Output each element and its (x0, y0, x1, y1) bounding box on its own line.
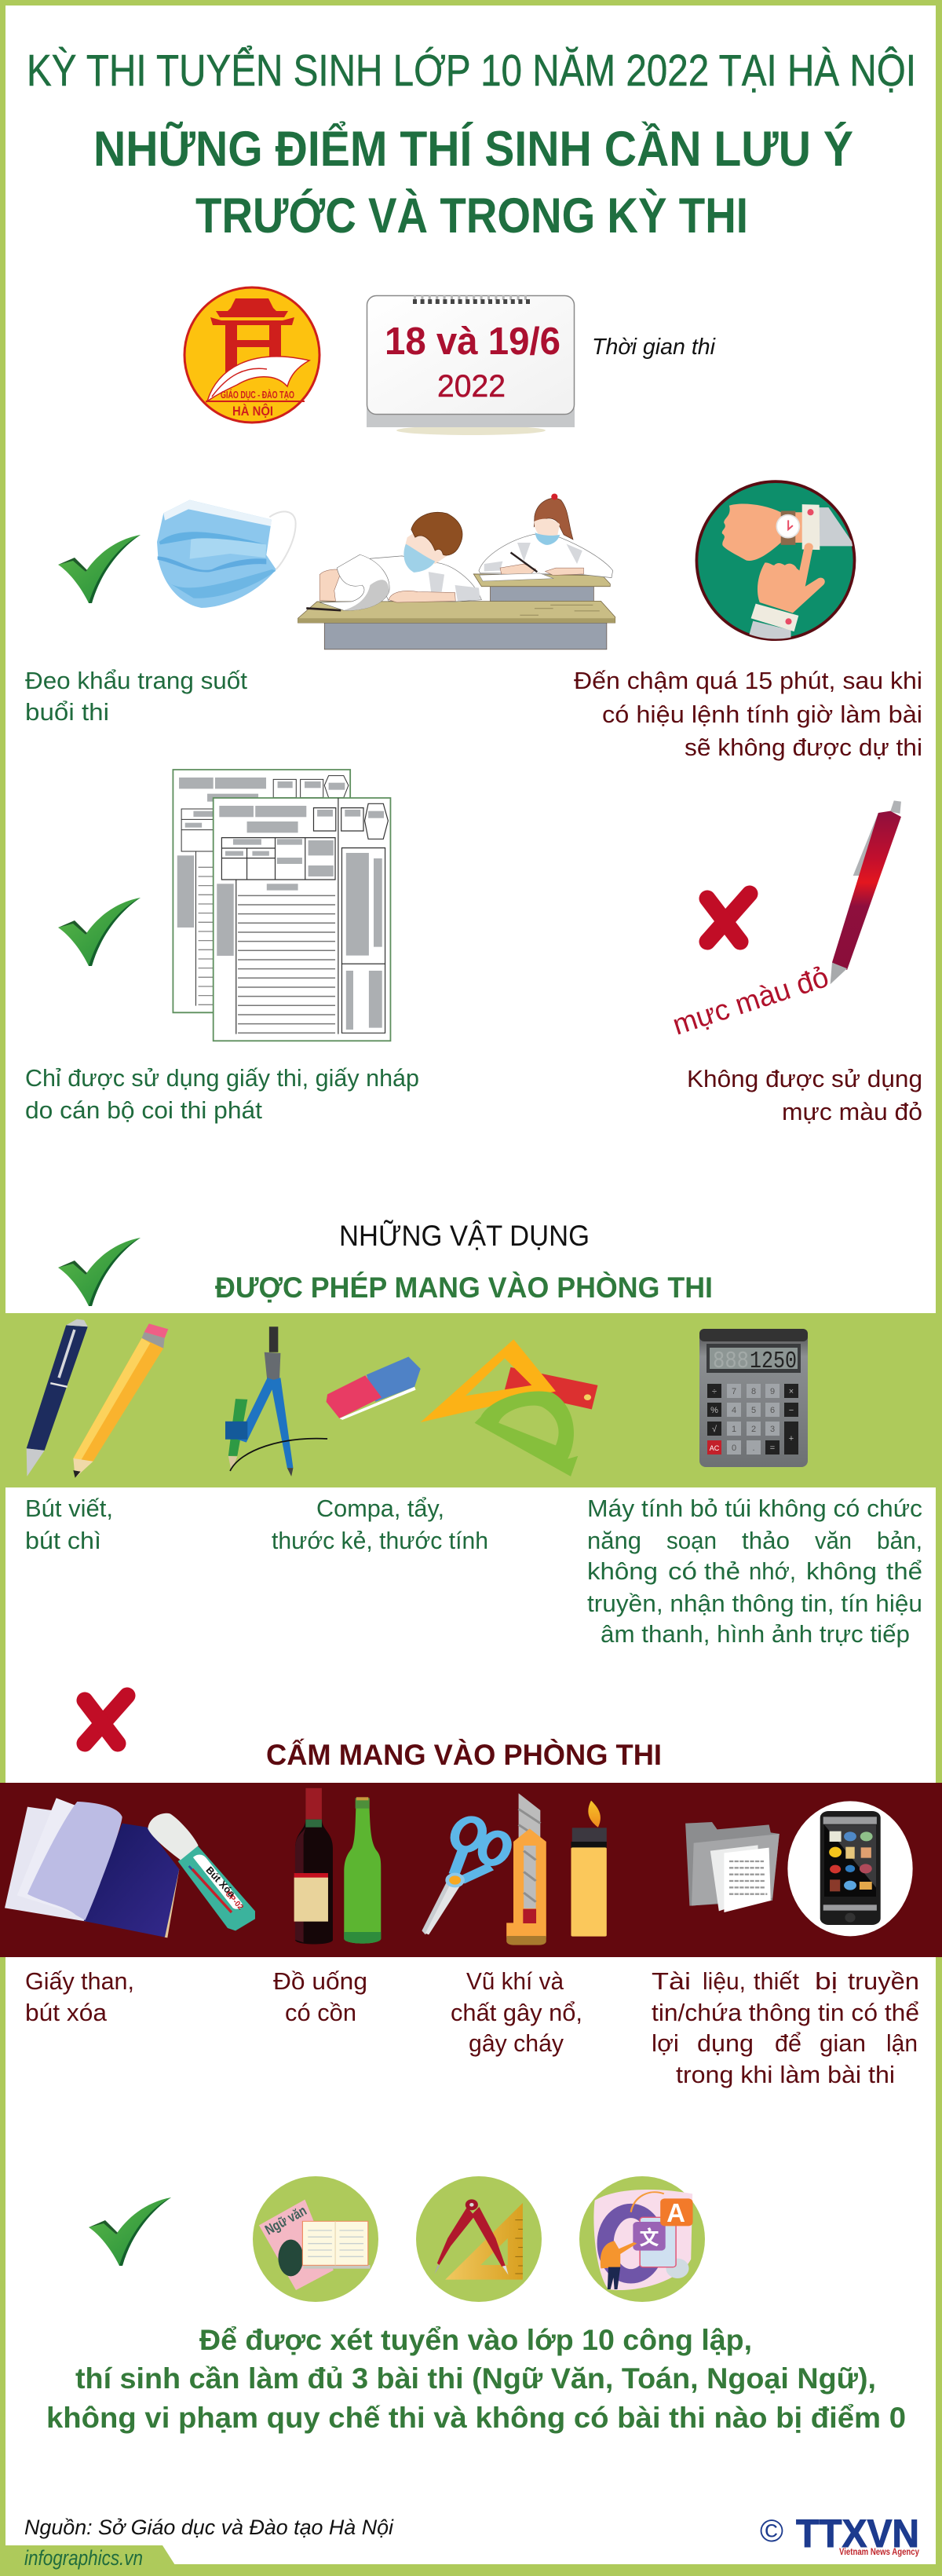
text: documents and devices: truyền (848, 1967, 919, 1995)
text: wear a mask: Đeo khẩu trang suốt (25, 667, 247, 694)
icon: compass (225, 1326, 327, 1476)
heading: allowed items: ĐƯỢC PHÉP MANG VÀO PHÒNG THI (215, 1271, 713, 1304)
icon: literature subject: Ngữ văn (262, 2202, 309, 2238)
icon: lighter (571, 1801, 607, 1937)
text: calculator rule: có (668, 1557, 697, 1585)
icon: mathematics subject (416, 2176, 542, 2302)
text: pens: Bút viết, (25, 1495, 113, 1522)
handwritten sample: red ink: mực màu đỏ (669, 961, 832, 1041)
icon: calculator: + (789, 1434, 794, 1444)
text: documents and devices: dụng (697, 2029, 754, 2057)
text: calculator rule: không (587, 1557, 658, 1585)
icon: calculator: 1 (732, 1425, 736, 1434)
icon: foreign language subject (579, 2176, 705, 2302)
text: documents and devices: trong khi làm bài thi (676, 2061, 895, 2088)
icon: calculator: 3 (770, 1425, 775, 1434)
icon: calculator: 5 (751, 1406, 756, 1415)
text: red ink rule (687, 1065, 922, 1125)
text: documents and devices: lợi (652, 2029, 679, 2057)
icon: correction pen (148, 1813, 255, 1930)
icon: smartphone in white oval (787, 1801, 913, 1936)
text: late arrival rule: Đến chậm quá 15 phút, sau khi (574, 667, 922, 694)
text: calculator rule: truyền, nhận thông tin, tín hiệu (587, 1590, 922, 1617)
text: admission condition: Để được xét tuyển vào lớp 10 công lập, (199, 2324, 752, 2356)
icon: surgical mask (157, 500, 296, 608)
text: alcohol: Đồ uống (273, 1967, 367, 1995)
text: weapons: chất gây nổ, (451, 1999, 582, 2026)
panel: forbidden items band (0, 1783, 942, 1957)
icon: calculator: ÷ (712, 1387, 717, 1396)
text: calculator rule: soạn (666, 1527, 717, 1554)
text: compass and rulers: Compa, tẩy, (316, 1495, 444, 1522)
icon: eraser (327, 1357, 421, 1420)
text: calculator rule: văn (815, 1527, 852, 1554)
icon: red cross 1 (707, 894, 750, 942)
text: late arrival rule: sẽ không được dự thi (685, 734, 922, 761)
icon: calculator (699, 1329, 808, 1467)
text: wear a mask (25, 667, 247, 726)
icon: check mark 3 (58, 1238, 141, 1306)
heading: forbidden items: CẤM MANG VÀO PHÒNG THI (266, 1738, 662, 1771)
text: carbon paper: bút xóa (25, 1999, 108, 2026)
icon: calculator: 2 (751, 1425, 756, 1434)
text: calculator rule (587, 1495, 922, 1648)
icon: calculator: 888 (713, 1348, 749, 1375)
text: carbon paper: Giấy than, (25, 1967, 134, 1995)
text: calculator rule: không (806, 1557, 877, 1585)
icon: exam answer sheets (173, 770, 390, 1041)
heading line 1: NHỮNG ĐIỂM THÍ SINH CẦN LƯU Ý (93, 121, 853, 177)
text: compass and rulers: thước kẻ, thước tính (272, 1527, 488, 1554)
text: weapons: Vũ khí và (466, 1967, 564, 1995)
icon: calculator: 6 (770, 1406, 775, 1415)
icon: red cross 2 (85, 1696, 127, 1744)
logo: TTXVN: © (760, 2514, 783, 2549)
icon: Hanoi education department logo: GIÁO DỤC - ĐÀO TẠO (221, 389, 294, 401)
icon: desk calendar with exam date (367, 295, 575, 435)
text: documents and devices: tin/chứa thông tin có thể (652, 1999, 919, 2026)
icon: calculator: 0 (732, 1444, 736, 1453)
icon: utility knife (506, 1793, 546, 1945)
icon: wine and beer bottles (294, 1788, 381, 1944)
text: calculator rule: năng (587, 1527, 641, 1554)
text: answer sheets rule (25, 1064, 419, 1124)
panel: allowed items band (0, 1313, 942, 1487)
text: calculator rule: thảo (742, 1527, 790, 1554)
text: documents and devices: liệu, (703, 1967, 746, 1995)
text: late arrival rule (574, 667, 922, 761)
text: weapons: gây cháy (469, 2029, 564, 2057)
icon: calculator: 4 (732, 1406, 736, 1415)
text: calculator rule: thẻ (704, 1557, 740, 1585)
icon: calculator: = (770, 1444, 775, 1453)
back desk (473, 574, 610, 602)
text: alcohol (273, 1967, 367, 2026)
illustration: two students taking the exam (298, 493, 615, 649)
text: alcohol: có cồn (285, 1999, 356, 2026)
text: admission condition: thí sinh cần làm đủ 3 bài thi (Ngữ Văn, Toán, Ngoại Ngữ), (75, 2362, 876, 2395)
icon: check mark 2 (58, 898, 141, 966)
icon: calculator: 9 (770, 1387, 775, 1396)
icon: foreign language subject: 文 (639, 2227, 659, 2249)
icon: red pen (831, 800, 901, 984)
text: weapons (451, 1967, 582, 2057)
text: answer sheets rule: Chỉ được sử dụng giấy thi, giấy nháp (25, 1064, 419, 1092)
text: red ink rule: mực màu đỏ (782, 1098, 922, 1125)
icon: rulers and protractor (421, 1339, 597, 1476)
exam time label: Thời gian thi (592, 335, 717, 360)
source note: Nguồn: Sở Giáo dục và Đào tạo Hà Nội (24, 2516, 394, 2539)
text: documents and devices: lận (886, 2029, 918, 2057)
exam year: 2022 (437, 369, 506, 404)
boy student (306, 512, 481, 610)
icon: Hanoi education department logo: HÀ NỘI (232, 404, 273, 419)
icon: pen and pencil (27, 1319, 168, 1478)
text: answer sheets rule: do cán bộ coi thi phát (25, 1096, 262, 1124)
text: pens (25, 1495, 113, 1554)
icon: correction pen: Bút Xóa (203, 1864, 238, 1900)
icon: calculator: % (710, 1406, 718, 1415)
text: admission condition (46, 2324, 906, 2434)
icon: calculator: . (752, 1444, 755, 1453)
text: documents and devices: bị (815, 1967, 838, 1995)
icon: check mark 1 (58, 535, 141, 603)
logo: TTXVN: TTXVN (796, 2512, 919, 2556)
text: calculator rule: nhớ, (749, 1557, 796, 1585)
text: admission condition: không vi phạm quy chế thi và không có bài thi nào bị điểm 0 (46, 2402, 906, 2434)
girl student (479, 493, 613, 581)
icon: calculator: 7 (732, 1387, 736, 1396)
icon: foreign language subject: A (666, 2198, 685, 2227)
icon: scissors (422, 1817, 511, 1934)
text: red ink rule: Không được sử dụng (687, 1065, 922, 1092)
text: calculator rule: Máy tính bỏ túi không có chức (587, 1495, 922, 1522)
icon: calculator: − (789, 1406, 794, 1415)
text: carbon paper (25, 1967, 134, 2026)
front desk (298, 601, 615, 649)
icon: check mark 4 (89, 2197, 171, 2266)
text: documents and devices: để (775, 2029, 801, 2057)
icon: correction pen: CP-02 (223, 1890, 245, 1912)
exam dates: 18 và 19/6 (385, 320, 560, 363)
icon: literature subject (253, 2176, 378, 2302)
text: calculator rule: thể (886, 1557, 922, 1585)
text: documents and devices: thiết (754, 1967, 799, 1995)
text: documents and devices: gian (820, 2029, 866, 2057)
logo: TTXVN: Vietnam News Agency (839, 2546, 919, 2557)
heading line 2: TRƯỚC VÀ TRONG KỲ THI (195, 188, 748, 243)
text: documents and devices: Tài (652, 1967, 691, 1995)
icon: hands pointing at a wrist watch (696, 481, 855, 645)
icon: carbon paper (5, 1798, 179, 1937)
icon: document folder (685, 1822, 780, 1912)
icon: calculator: × (789, 1387, 794, 1396)
text: documents and devices (652, 1967, 919, 2088)
icon: Hanoi education department logo (184, 287, 319, 423)
icon: calculator: 8 (751, 1387, 756, 1396)
icon: calculator: √ (712, 1425, 717, 1434)
icon: calculator: AC (710, 1444, 720, 1452)
text: pens: bút chì (25, 1527, 101, 1554)
text: calculator rule: âm thanh, hình ảnh trực tiếp (601, 1620, 910, 1648)
text: wear a mask: buổi thi (25, 698, 109, 726)
icon: calculator: 1250 (750, 1348, 797, 1375)
text: compass and rulers (272, 1495, 488, 1554)
text: calculator rule: bản, (877, 1527, 922, 1554)
footer tab: infographics.vn: infographics.vn (24, 2546, 143, 2570)
heading: items: NHỮNG VẬT DỤNG (339, 1220, 590, 1252)
text: late arrival rule: có hiệu lệnh tính giờ làm bài (602, 701, 922, 728)
